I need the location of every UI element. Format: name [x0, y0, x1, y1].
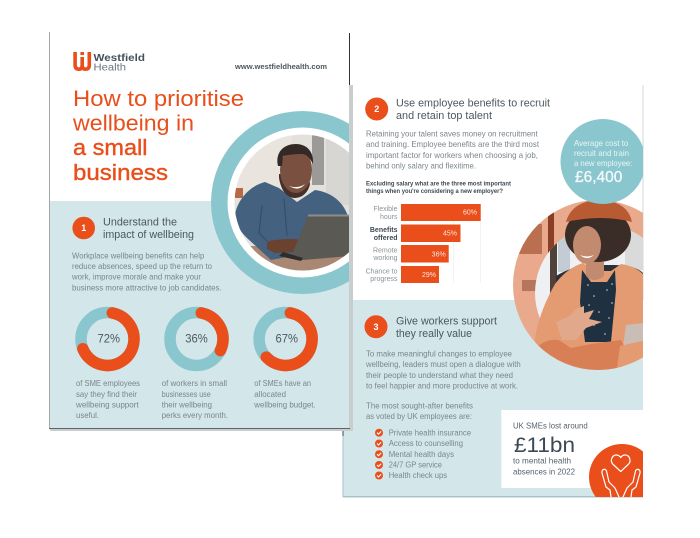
section 3 heading: Give workers support — [396, 316, 497, 328]
section 1 heading: impact of wellbeing — [103, 229, 194, 241]
callout: mental health absences: UK SMEs lost around — [513, 421, 588, 431]
benefits intro text: as voted by UK employees are: — [366, 411, 472, 421]
callout: mental health absences — [501, 410, 643, 497]
caption: 67%: of SMEs have an — [254, 378, 311, 388]
section 2 body text: important factor for workers when choosing a job, — [366, 150, 538, 160]
photo ring — [211, 111, 349, 294]
section 1 body text — [71, 250, 222, 292]
chart question: things when you're considering a new employer? — [366, 188, 503, 195]
bar: remote working: 36% — [432, 252, 446, 258]
section 2 heading: and retain top talent — [396, 110, 492, 122]
panel: right page — [342, 85, 644, 498]
bar: flexible hours: 60% — [463, 210, 477, 216]
section 3 body text: to feel happier and more productive at work. — [366, 380, 518, 390]
donut chart: 36%: 36% — [185, 334, 208, 346]
checklist of benefits — [375, 427, 471, 480]
logo: Westfield Health — [75, 52, 145, 74]
bar chart — [366, 204, 481, 283]
caption: 67% — [253, 378, 316, 410]
caption: 67%: allocated — [254, 389, 286, 399]
section 2 heading: Use employee benefits to recruit — [396, 98, 550, 110]
stat circle: average recruitment cost: a new employee: — [574, 158, 632, 168]
caption: 36% — [162, 378, 228, 420]
section 3 body text: their people to understand what they need — [366, 370, 513, 380]
section 1 body text: work, improve morale and make your — [71, 272, 201, 282]
caption: 36%: businesses use — [162, 389, 211, 399]
callout: mental health absences: absences in 2022 — [513, 466, 575, 476]
section 1 heading — [103, 217, 194, 241]
benefits intro text: The most sought-after benefits — [366, 400, 473, 410]
bar: benefits offered: offered — [374, 235, 398, 242]
chart question — [366, 180, 512, 195]
bar: chance to progress: progress — [370, 276, 398, 283]
checklist of benefits: Access to counselling — [389, 438, 463, 448]
title: business — [73, 160, 168, 185]
photo: smiling man at laptop — [234, 134, 349, 270]
section 1 number badge: 1 — [81, 223, 86, 233]
stat circle: average recruitment cost: recruit and train — [574, 148, 629, 158]
website address: www.westfieldhealth.com — [234, 62, 327, 71]
section 2 body text — [366, 129, 540, 170]
section 2 body text: behind only salary and flexitime. — [366, 160, 476, 170]
bar: flexible hours: hours — [380, 214, 398, 221]
donut chart: 67% — [254, 308, 317, 370]
bar: remote working: Remote — [373, 248, 398, 254]
bar: benefits offered: Benefits — [370, 227, 398, 234]
caption: 72%: of SME employees — [76, 378, 140, 388]
section 3 heading: they really value — [396, 328, 472, 340]
section 1 body text: reduce absences, speed up the return to — [72, 261, 212, 271]
section 2 body text: and training. Employee benefits are the third most — [366, 139, 540, 149]
checklist of benefits: Health check ups — [389, 470, 447, 480]
section 1 heading: Understand the — [103, 217, 177, 229]
section 3 body text: To make meaningful changes to employee — [366, 349, 512, 359]
checklist of benefits: Mental health days — [389, 449, 454, 459]
section 3 body text: wellbeing, leaders must open a dialogue with — [365, 359, 521, 369]
section 3 number badge — [364, 315, 388, 338]
donut chart: 72% — [76, 308, 139, 370]
section 2 number badge: 2 — [374, 104, 379, 114]
benefits intro text — [366, 402, 473, 420]
caption: 72%: useful. — [76, 410, 99, 420]
checklist of benefits: Private health insurance — [389, 427, 471, 437]
bar: chance to progress: 29% — [422, 272, 436, 279]
caption: 72%: wellbeing support — [75, 400, 139, 410]
bar: benefits offered: 45% — [443, 230, 457, 238]
title: a small — [73, 135, 148, 160]
section 2 heading — [396, 98, 550, 122]
title: How to prioritise — [73, 86, 244, 111]
title — [72, 86, 244, 185]
logo: Westfield Health: Westfield — [94, 53, 145, 64]
photo: smiling woman at laptop — [513, 200, 643, 370]
caption: 36%: of workers in small — [162, 378, 227, 388]
caption: 36%: perks every month. — [162, 410, 228, 420]
donut chart: 36% — [165, 308, 228, 370]
logo: Westfield Health: Health — [94, 62, 126, 74]
caption: 67%: wellbeing budget. — [253, 400, 316, 410]
donut chart: 72%: 72% — [98, 334, 120, 346]
bar: flexible hours: Flexible — [373, 206, 398, 213]
bar: chance to progress: Chance to — [366, 268, 398, 276]
stat circle: average recruitment cost — [560, 119, 646, 204]
checklist of benefits: 24/7 GP service — [389, 460, 442, 470]
section 3 body text — [365, 349, 521, 390]
caption: 72%: say they find their — [76, 389, 137, 399]
icon: hands holding heart — [589, 444, 643, 497]
stat circle: average recruitment cost: Average cost to — [574, 138, 629, 148]
stat circle: average recruitment cost: £6,400 — [575, 169, 623, 186]
title: wellbeing in — [72, 111, 194, 136]
bar: remote working — [372, 245, 449, 262]
bar: benefits offered — [370, 224, 460, 242]
bar: remote working: working — [372, 255, 398, 262]
callout: mental health absences: to mental health — [513, 456, 571, 466]
section 1 body text: business more attractive to job candidates. — [72, 282, 222, 292]
panel: left page — [49, 32, 350, 429]
section 2 number badge — [365, 98, 388, 120]
bar: chance to progress — [366, 266, 439, 283]
caption: 72% — [76, 380, 140, 418]
section 3 number badge: 3 — [373, 322, 379, 332]
callout: mental health absences: £11bn — [514, 434, 575, 457]
bar: flexible hours — [373, 204, 481, 221]
donut chart: 67%: 67% — [276, 334, 298, 346]
section 1 number badge — [72, 217, 95, 239]
caption: 36%: their wellbeing — [162, 400, 212, 410]
section 3 heading — [396, 316, 497, 340]
chart question: Excluding salary what are the three most important — [366, 180, 512, 188]
section 1 body text: Workplace wellbeing benefits can help — [72, 250, 204, 260]
section 2 body text: Retaining your talent saves money on recruitment — [366, 129, 538, 139]
page shadow — [50, 33, 353, 436]
